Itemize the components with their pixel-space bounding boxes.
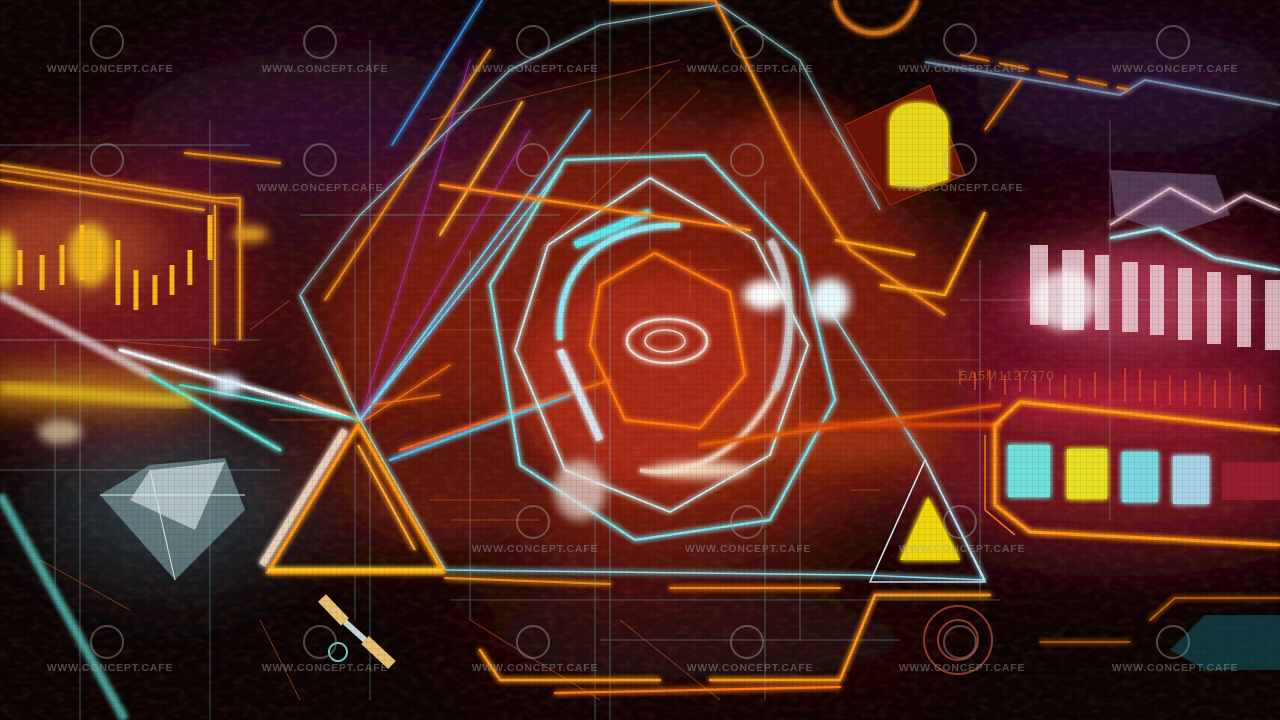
watermarks: WWW.CONCEPT.CAFE: [47, 63, 173, 75]
central octagon rings: [490, 155, 835, 540]
panel: top right bracket: [925, 55, 1280, 105]
radial streaks: [0, 0, 610, 460]
icon: orange outlined triangle: [262, 425, 443, 572]
mesh mountain: [1110, 170, 1230, 235]
watermarks: WWW.CONCEPT.CAFE: [899, 662, 1025, 674]
icon: yellow warning triangle: [870, 460, 985, 582]
mid white polygon: [515, 178, 808, 512]
candlesticks: [20, 215, 210, 310]
swatch: pale blue: [1173, 456, 1209, 504]
icon: satellite: [322, 598, 392, 665]
data label: 5A5M1127370: [960, 368, 1055, 383]
watermarks: WWW.CONCEPT.CAFE: [472, 63, 598, 75]
red data ticks: [960, 368, 1260, 410]
striped bars: [1030, 245, 1280, 350]
panel: left candlestick chart: [0, 165, 268, 375]
fine circuit detail: [40, 60, 980, 700]
swatch: cyan: [1008, 445, 1050, 497]
watermarks: WWW.CONCEPT.CAFE: [685, 543, 811, 555]
watermarks: WWW.CONCEPT.CAFE: [1112, 662, 1238, 674]
watermarks: WWW.CONCEPT.CAFE: [472, 662, 598, 674]
watermarks: WWW.CONCEPT.CAFE: [47, 662, 173, 674]
swatch: red: [1222, 462, 1280, 500]
watermarks: WWW.CONCEPT.CAFE: [257, 182, 383, 194]
white flares on ring: [38, 278, 850, 520]
watermarks: WWW.CONCEPT.CAFE: [262, 662, 388, 674]
teal corner streak: [0, 495, 125, 720]
icon: lower circular radar: [924, 606, 992, 674]
swatch: yellow: [1067, 449, 1107, 499]
watermarks: WWW.CONCEPT.CAFE: [899, 543, 1025, 555]
watermarks: WWW.CONCEPT.CAFE: [897, 182, 1023, 194]
large hexagon outline: [300, 0, 1022, 580]
mountain chart cyan: [1110, 228, 1280, 270]
panel: right bar chart: [1030, 170, 1280, 350]
outer cyan polygon: [490, 155, 835, 540]
orange horizontal streaks: [440, 185, 1280, 693]
watermarks: WWW.CONCEPT.CAFE: [262, 63, 388, 75]
watermarks: WWW.CONCEPT.CAFE: [687, 662, 813, 674]
panel: bottom right teal block: [1170, 615, 1280, 670]
mountain chart: [1110, 188, 1280, 225]
inner thick blue arc: [560, 225, 680, 340]
watermarks: WWW.CONCEPT.CAFE: [472, 543, 598, 555]
panel: right colour swatches: [985, 402, 1280, 545]
icon: yellow shield: [890, 103, 948, 187]
watermark icons: [91, 24, 1189, 658]
orange octagon: [590, 253, 745, 428]
panel: top-right yellow badge: [845, 85, 965, 205]
swatch: light blue: [1122, 452, 1158, 502]
yellow horizontal flare: [0, 388, 190, 402]
chart flare: [1033, 270, 1097, 330]
icon: pale diamond: [100, 458, 245, 580]
watermarks: [47, 63, 1238, 674]
watermarks: WWW.CONCEPT.CAFE: [687, 63, 813, 75]
icon: top ring gauge: [835, 0, 917, 33]
watermarks: WWW.CONCEPT.CAFE: [1112, 63, 1238, 75]
watermarks: WWW.CONCEPT.CAFE: [899, 63, 1025, 75]
center eye: [627, 319, 707, 363]
